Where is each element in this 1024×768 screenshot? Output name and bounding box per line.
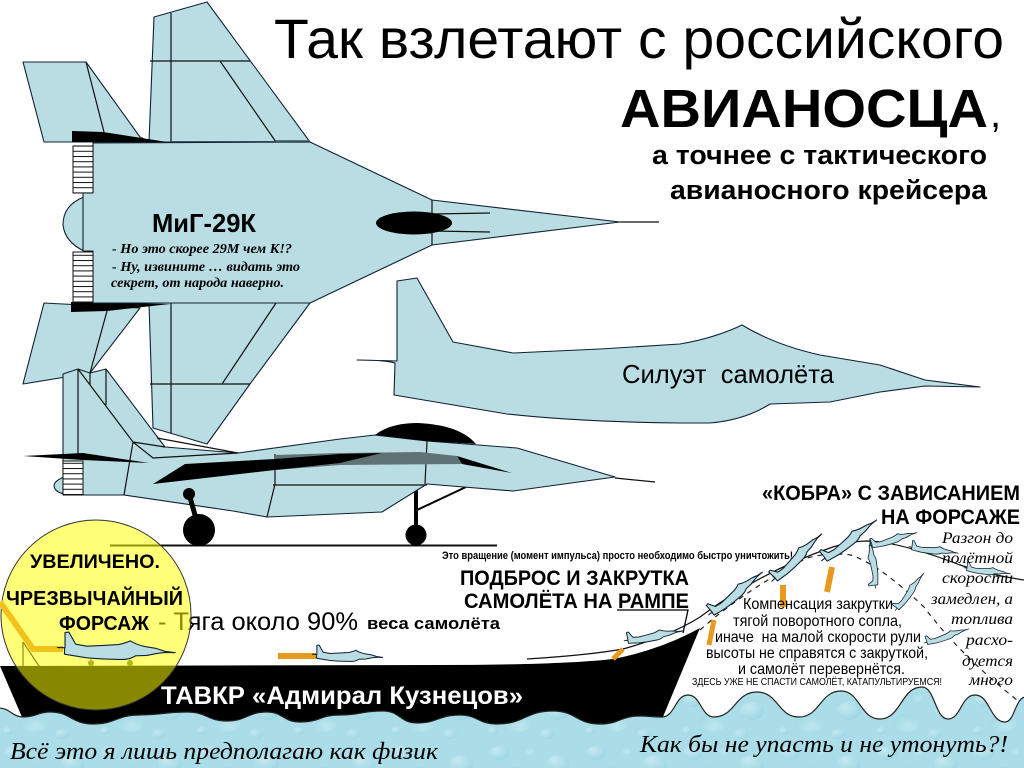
main gear (183, 488, 215, 546)
acceleration note: расхо- (965, 632, 1013, 649)
lower tail (23, 302, 170, 384)
fuselage (83, 142, 620, 303)
compensation text: иначе на малой скорости рули (715, 629, 921, 646)
acceleration note: много (968, 672, 1013, 689)
flight trajectory dashed (700, 554, 1017, 700)
upper wing (149, 2, 310, 144)
ramp heading: ПОДБРОС И ЗАКРУТКА (460, 567, 689, 590)
upper tail (23, 62, 167, 142)
ramp heading: САМОЛЁТА НА РАМПЕ (464, 590, 689, 613)
acceleration note: замедлен, а (930, 591, 1013, 608)
flight trajectory solid (527, 541, 1024, 659)
note text: секрет, от народа наверно. (111, 276, 284, 291)
circle text (6, 552, 183, 635)
nose probe (620, 221, 659, 223)
ramp launch in circle (0, 520, 191, 710)
exhaust flames (613, 567, 832, 659)
launch frame (23, 642, 39, 666)
cobra heading (762, 482, 1020, 529)
upper nozzle (73, 146, 93, 193)
acceleration note: дуется (962, 653, 1013, 670)
silhouette of aircraft (357, 278, 980, 423)
cobra heading: НА ФОРСАЖЕ (881, 506, 1020, 529)
acceleration note: Разгон до (941, 530, 1013, 547)
lower nozzle (73, 252, 93, 302)
top view of aircraft (23, 2, 659, 444)
planes along path (623, 511, 1011, 647)
plane in circle (57, 632, 175, 659)
cobra manoeuvre aircraft (613, 511, 1011, 659)
strake black (153, 453, 382, 484)
ship (0, 628, 700, 724)
title: , (990, 92, 1001, 136)
note text: - Ну, извините … видать это (112, 260, 300, 275)
compensation text: и самолёт перевернётся. (738, 661, 905, 678)
bottom right note: Как бы не упасть и не утонуть?! (639, 732, 1008, 758)
title: АВИАНОСЦА (620, 79, 988, 139)
tail cone (54, 477, 64, 494)
compensation text: тягой поворотного сопла, (733, 613, 902, 630)
title: Так взлетают с российского (274, 7, 1004, 70)
circle text: ЧРЕЗВЫЧАЙНЫЙ (6, 586, 183, 610)
side view of aircraft (23, 369, 655, 546)
rotation note: Это вращение (момент импульса) просто необходимо быстро уничтожить! (442, 550, 793, 562)
circle text: УВЕЛИЧЕНО. (30, 552, 160, 573)
ship name: ТАВКР «Адмирал Кузнецов» (161, 682, 523, 710)
compensation text: высоты не справятся с закруткой, (706, 645, 928, 662)
plane with afterburner on deck (278, 645, 383, 661)
wheels (88, 655, 133, 666)
subtitle (652, 140, 988, 205)
nose lines (432, 200, 490, 245)
ground line (110, 544, 497, 546)
acceleration note: полётной (942, 550, 1013, 567)
cockpit (376, 212, 452, 234)
tail spike (23, 453, 149, 463)
strake tip (457, 456, 512, 473)
yellow circle (1, 520, 191, 710)
acceleration note (930, 530, 1013, 689)
bottom left note: Всё это я лишь предполагаю как физик (10, 739, 439, 765)
compensation text: Компенсация закрутки (743, 596, 893, 613)
strake grey band (275, 452, 462, 470)
water (0, 687, 1024, 768)
detail lines (78, 369, 427, 517)
tail bulge (63, 197, 84, 251)
nose gear (406, 487, 466, 546)
subtitle: авианосного крейсера (670, 175, 988, 205)
side nozzle (63, 461, 83, 495)
circle text: ФОРСАЖ (59, 613, 150, 635)
compensation text (692, 596, 942, 688)
aircraft name: МиГ-29К (152, 208, 256, 238)
title (274, 7, 1004, 139)
acceleration note: топлива (951, 611, 1013, 628)
fuselage side (63, 369, 615, 517)
note text (111, 242, 300, 291)
canopy (375, 423, 476, 444)
subtitle: а точнее с тактического (652, 140, 987, 170)
acceleration note: скорости (942, 570, 1013, 587)
ramp heading (460, 567, 689, 633)
thrust trail (0, 602, 63, 649)
weight text: веса самолёта (367, 614, 501, 633)
compensation text: ЗДЕСЬ УЖЕ НЕ СПАСТИ САМОЛЁТ, КАТАПУЛЬТИРУЕМСЯ! (692, 676, 942, 688)
thrust text: - Тяга около 90% (158, 608, 358, 636)
note text: - Но это скорее 29М чем К!? (112, 242, 292, 257)
silhouette label: Силуэт самолёта (622, 359, 835, 389)
nose probe (615, 478, 655, 482)
lower wing (149, 303, 310, 444)
